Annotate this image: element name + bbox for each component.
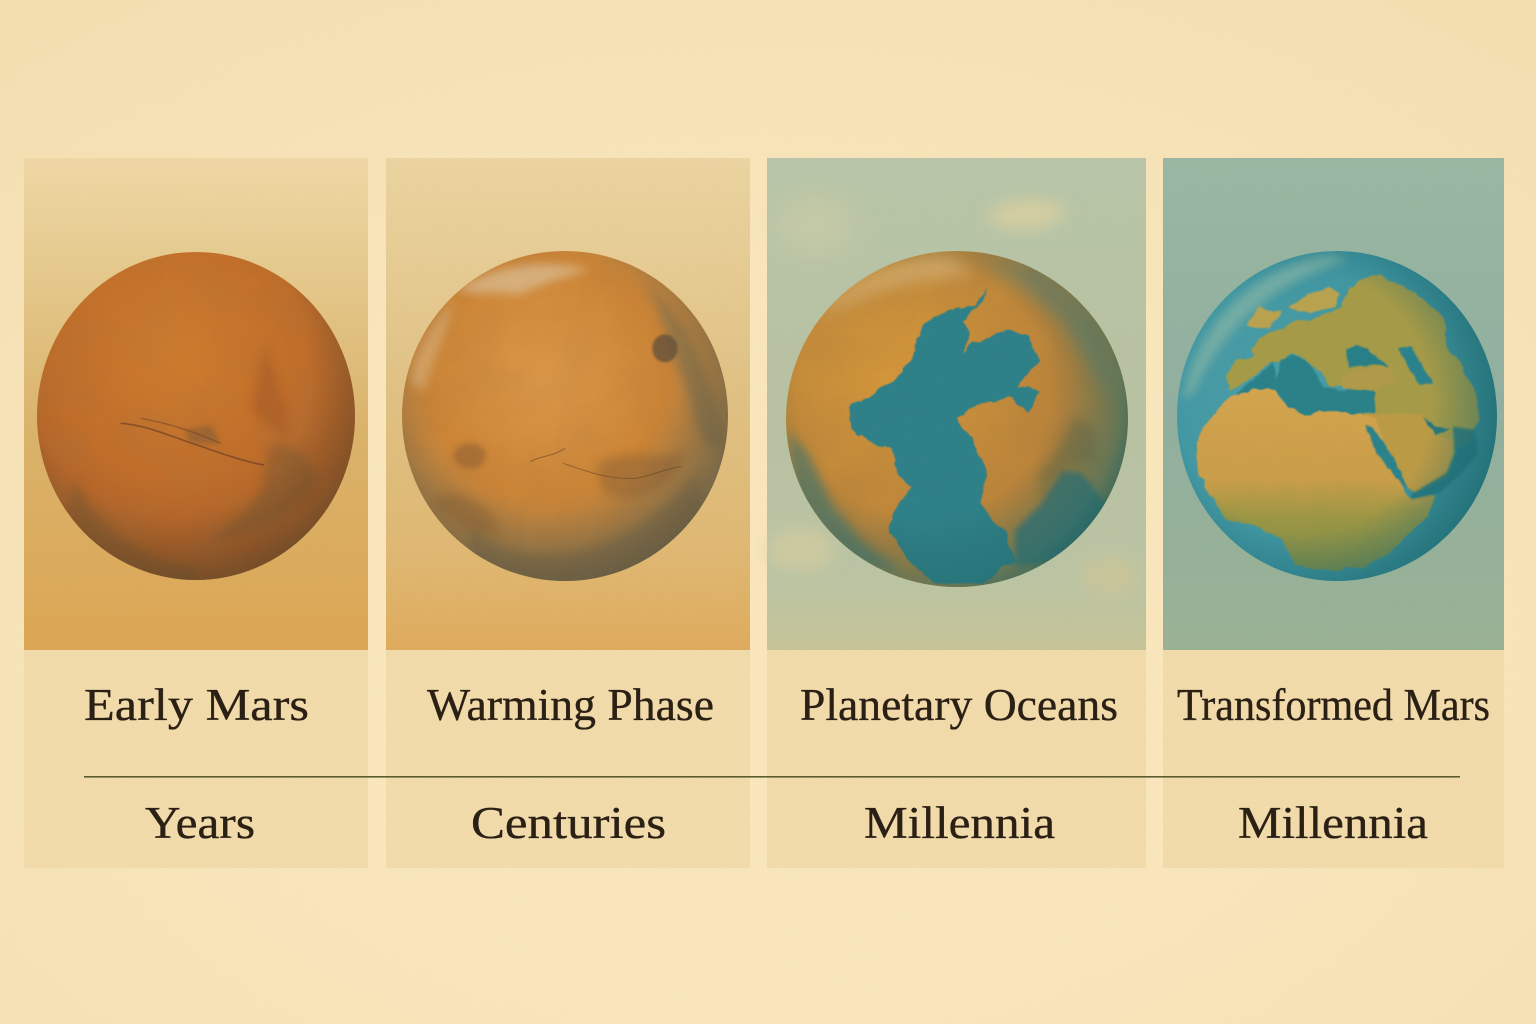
Black Sea — [1346, 345, 1390, 367]
Eurasia — [1225, 275, 1480, 493]
Scandinavia — [1290, 287, 1340, 313]
Caspian Sea — [1398, 347, 1433, 385]
Indian Ocean — [1411, 427, 1478, 499]
Persian Gulf — [1423, 417, 1450, 437]
ocean — [848, 287, 1040, 583]
Arabia — [1363, 413, 1453, 492]
panel background: Planetary Oceans — [765, 158, 1146, 868]
southeast sea — [1015, 470, 1108, 567]
panel background: Transformed Mars — [1163, 158, 1504, 868]
duration: Centuries: Centuries — [471, 798, 666, 848]
Britain — [1246, 307, 1281, 328]
planet: Warming Phase — [402, 251, 728, 587]
planet: Early Mars — [37, 252, 355, 587]
Turkey — [1340, 367, 1396, 390]
panel: Early Mars — [24, 158, 368, 868]
planet: Planetary Oceans — [786, 251, 1128, 587]
duration: Years: Years — [145, 798, 255, 848]
panel: Warming Phase — [386, 158, 750, 868]
eastern dark land — [1038, 417, 1095, 500]
Red Sea — [1365, 425, 1408, 488]
Mediterranean — [1233, 353, 1376, 420]
label: Planetary Oceans: Planetary Oceans — [800, 680, 1118, 730]
duration: Millennia: Millennia — [864, 798, 1055, 848]
duration: Millennia: Millennia — [1238, 798, 1428, 848]
Africa — [1196, 388, 1436, 570]
panel: Planetary Oceans — [765, 158, 1146, 868]
label: Warming Phase: Warming Phase — [427, 680, 714, 730]
label: Transformed Mars: Transformed Mars — [1177, 680, 1490, 730]
planet: Transformed Mars — [1177, 251, 1497, 581]
southwest limb — [788, 430, 902, 573]
label: Early Mars: Early Mars — [84, 680, 309, 730]
northeast limb — [986, 258, 1114, 389]
panel: Transformed Mars — [1163, 158, 1504, 868]
timeline line — [84, 776, 1460, 778]
panel background: Warming Phase — [386, 158, 750, 868]
panel background: Early Mars — [24, 158, 368, 868]
